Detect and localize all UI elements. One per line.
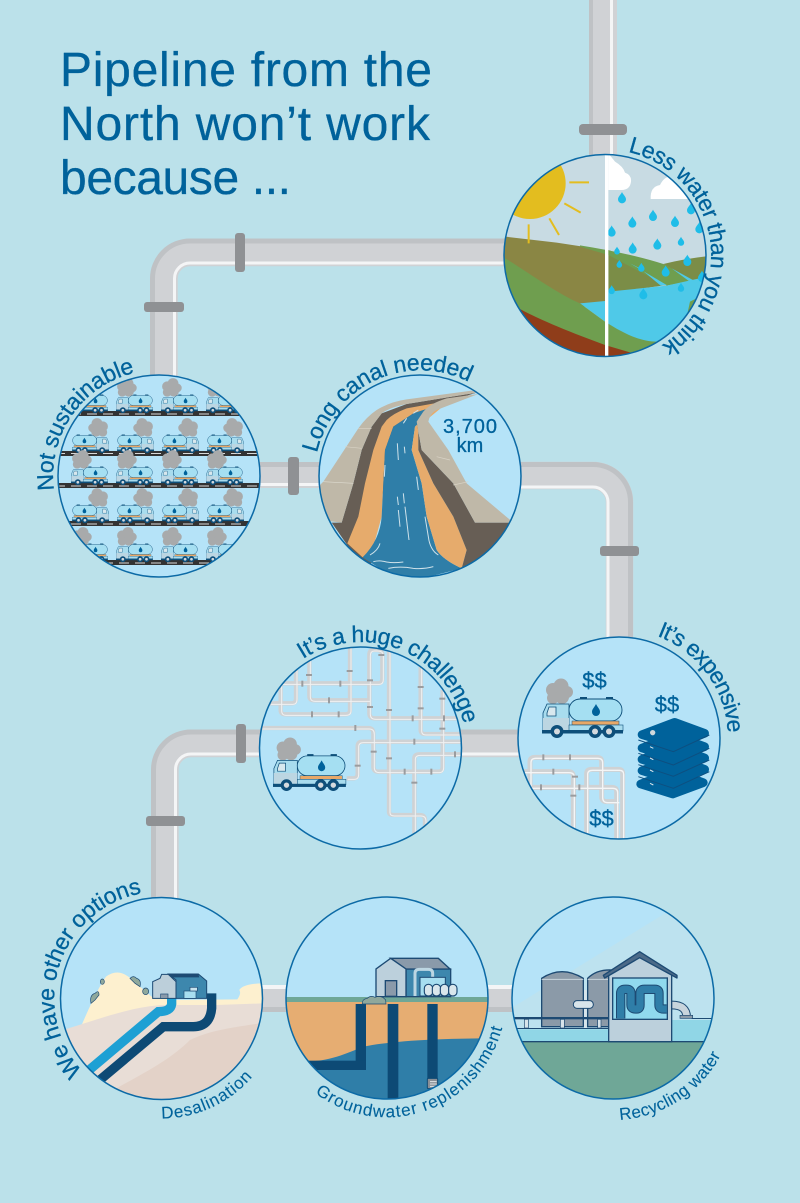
panel: it's expensive bbox=[517, 622, 740, 840]
title bbox=[60, 44, 432, 205]
pipe: Not sustainable to canal bbox=[255, 457, 325, 495]
label: recycling water: Recycling water bbox=[620, 1051, 720, 1120]
circle outline bbox=[60, 898, 262, 1100]
circle outline bbox=[286, 897, 488, 1099]
label: not sustainable: Not sustainable bbox=[37, 361, 133, 490]
panel: recycling water bbox=[511, 896, 720, 1120]
illustration: tangle of pipes and tanker bbox=[260, 648, 461, 848]
illustration: tanker, pipes, bladders and costs bbox=[518, 638, 719, 838]
label: it's expensive: It’s expensive bbox=[658, 622, 740, 732]
circle outline bbox=[319, 375, 521, 577]
title: North won’t work bbox=[60, 98, 431, 151]
panel: it's a huge challenge bbox=[258, 625, 474, 850]
illustration: canal perspective bbox=[315, 372, 525, 583]
panel: long canal needed bbox=[302, 356, 522, 578]
panel: less water than you think bbox=[503, 136, 726, 358]
stat: 3,700 km: 3,700 bbox=[443, 416, 497, 438]
illustration: coastal desalination plant bbox=[62, 898, 262, 1099]
panel: not sustainable bbox=[37, 361, 261, 578]
label: we have other options: We have other options bbox=[42, 882, 140, 1081]
illustration: sun, rain and dry hills bbox=[504, 155, 706, 356]
cost: pipes: $$ bbox=[589, 806, 614, 831]
circle outline bbox=[512, 897, 714, 1099]
circle outline bbox=[504, 154, 706, 356]
title: because ... bbox=[60, 152, 291, 205]
circle outline bbox=[260, 647, 462, 849]
cost: tanker: $$ bbox=[582, 668, 607, 693]
panel: desalination bbox=[42, 882, 264, 1119]
label: desalination: Desalination bbox=[162, 1072, 252, 1119]
illustration: rows of road tankers bbox=[55, 372, 265, 582]
label: less water than you think: Less water than you think bbox=[630, 136, 726, 356]
title: Pipeline from the bbox=[60, 44, 432, 97]
pipe: first circle to Not sustainable bbox=[144, 233, 510, 380]
circle outline bbox=[58, 375, 260, 577]
panel: groundwater replenishment bbox=[285, 896, 502, 1118]
illustration: recycling plant with tanks bbox=[512, 898, 712, 1098]
label: long canal needed: Long canal needed bbox=[302, 356, 474, 452]
illustration: injection bores and aquifer bbox=[286, 898, 488, 1098]
cost: bladders: $$ bbox=[655, 692, 679, 717]
pipe: top inlet bbox=[579, 0, 627, 160]
circle outline bbox=[518, 637, 720, 839]
pipe: expensive through challenge to options bbox=[146, 724, 525, 905]
stat: 3,700 km: km bbox=[457, 435, 483, 457]
pipe: canal to expensive bbox=[515, 464, 639, 645]
pipeline network bbox=[144, 0, 639, 1012]
pipe: bottom row connector bbox=[255, 985, 520, 1012]
stat: 3,700 km bbox=[443, 416, 497, 457]
label: it's a huge challenge: It’s a huge challenge bbox=[296, 625, 474, 722]
label: groundwater replenishment: Groundwater replenishment bbox=[318, 1026, 502, 1118]
icon: stack of water bladders bbox=[638, 722, 709, 794]
